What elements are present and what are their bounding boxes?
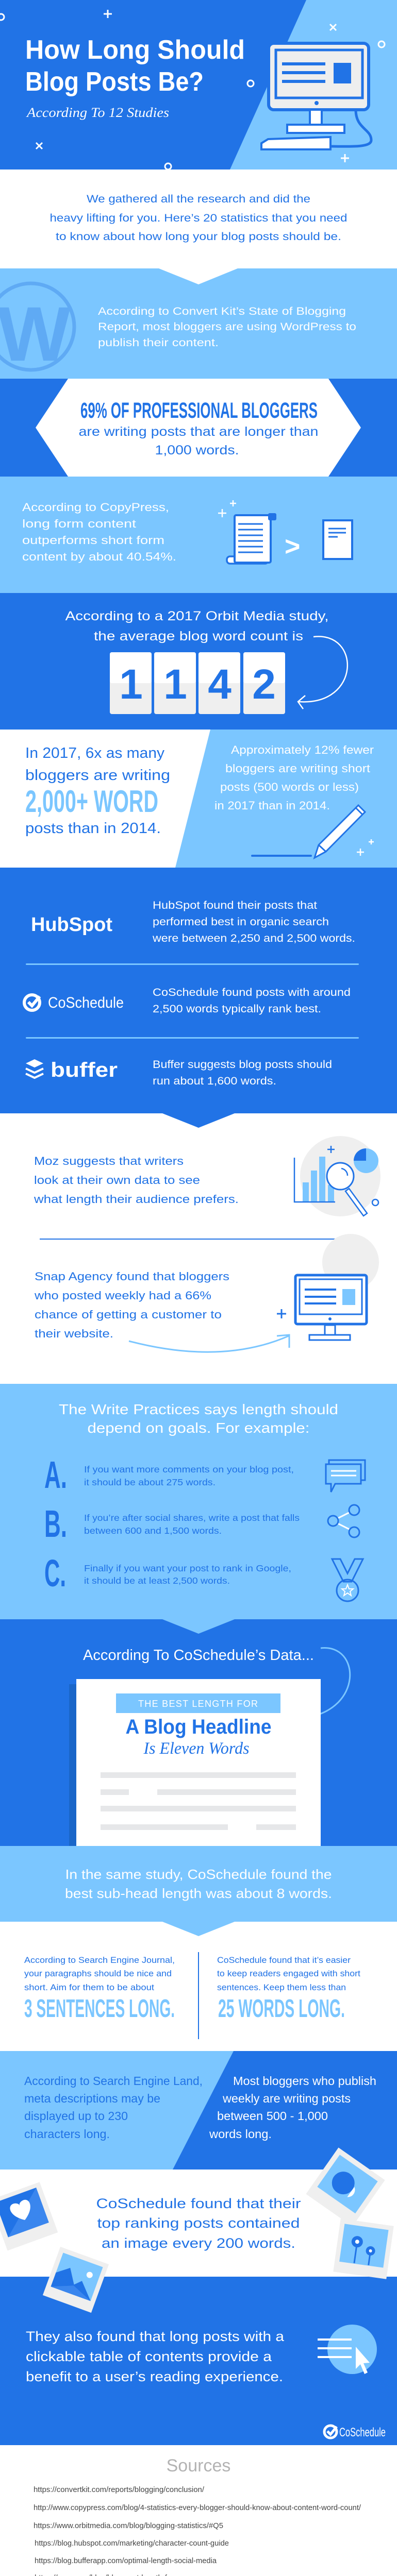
counter tiles 1142: 1 bbox=[163, 661, 187, 708]
panel: 2017 split bbox=[0, 730, 397, 868]
icon: click list bbox=[318, 2325, 377, 2374]
text: copypress bbox=[22, 501, 176, 563]
counter tiles 1142 bbox=[110, 652, 285, 714]
text: moz bbox=[34, 1155, 239, 1206]
text: 12% fewer: Approximately 12% fewer bbox=[231, 743, 374, 756]
text: coschedule: CoSchedule found posts with around bbox=[153, 987, 351, 998]
text: buffer bbox=[153, 1059, 332, 1087]
card: headline length: THE BEST LENGTH FOR bbox=[138, 1699, 258, 1709]
text: 6x as many: bloggers are writing bbox=[25, 767, 170, 784]
panel: 69% hexagon bbox=[0, 379, 397, 477]
sources list: https://blog.bufferapp.com/optimal-length-social-media bbox=[35, 2557, 217, 2565]
text: wordpress: Report, most bloggers are using WordPress to bbox=[98, 321, 356, 333]
text: search engine journal: short. Aim for them to be about bbox=[24, 1982, 154, 1992]
text: hubspot bbox=[152, 900, 355, 944]
panel: moz and snap bbox=[0, 1113, 397, 1384]
text: buffer: Buffer suggests blog posts should bbox=[153, 1059, 332, 1071]
icon: long vs short doc: > bbox=[285, 532, 300, 562]
item A: If you want more comments on your blog post, bbox=[84, 1464, 294, 1475]
text: meta descriptions: According to Search Engine Land, bbox=[24, 2074, 203, 2088]
text: snap agency: Snap Agency found that bloggers bbox=[35, 1270, 229, 1283]
text: copypress: outperforms short form bbox=[22, 534, 164, 547]
text: wordpress: publish their content. bbox=[98, 337, 219, 349]
text: weekly bloggers: Most bloggers who publish bbox=[233, 2074, 376, 2088]
text: snap agency: chance of getting a customer to bbox=[35, 1308, 222, 1321]
text: weekly bloggers: weekly are writing posts bbox=[222, 2092, 351, 2105]
heading: write practice: The Write Practices says length should bbox=[59, 1401, 338, 1417]
text: moz: what length their audience prefers. bbox=[34, 1193, 239, 1206]
item B: between 600 and 1,500 words. bbox=[84, 1526, 222, 1536]
icon: polaroid flowers bbox=[333, 2218, 394, 2279]
logo: buffer: buffer bbox=[51, 1059, 118, 1081]
panel: table of contents bbox=[0, 2277, 397, 2445]
text: table of contents bbox=[26, 2329, 285, 2384]
item B: B. bbox=[44, 1502, 67, 1545]
text: hubspot: HubSpot found their posts that bbox=[153, 900, 317, 911]
intro text: heavy lifting for you. Here’s 20 statistics that you need bbox=[49, 212, 348, 224]
panel: sub-head length bbox=[0, 1846, 397, 1922]
panel: write practice bbox=[0, 1384, 397, 1619]
text: search engine journal: According to Search Engine Journal, bbox=[24, 1955, 175, 1965]
text: hubspot: were between 2,250 and 2,500 words. bbox=[152, 933, 355, 944]
text: table of contents: They also found that long posts with a bbox=[26, 2329, 285, 2344]
text: 6x as many bbox=[25, 745, 170, 837]
subtitle: According To 12 Studies bbox=[26, 105, 169, 120]
item A bbox=[44, 1453, 294, 1496]
sources heading: Sources bbox=[167, 2456, 230, 2476]
item B: If you’re after social shares, write a post that falls bbox=[84, 1513, 300, 1523]
card: headline length: Is Eleven Words bbox=[143, 1739, 250, 1758]
text: orbit: According to a 2017 Orbit Media study, bbox=[65, 609, 329, 623]
icon: long vs short doc bbox=[218, 500, 352, 564]
counter tiles 1142: 1 bbox=[119, 661, 143, 708]
text: buffer: run about 1,600 words. bbox=[153, 1075, 276, 1087]
text: search engine journal: 3 SENTENCES LONG. bbox=[24, 1995, 175, 2023]
text: short sentences: CoSchedule found that it’s easier bbox=[217, 1955, 351, 1965]
text: snap agency: their website. bbox=[35, 1327, 113, 1340]
logo: hubspot: HubSpot bbox=[31, 914, 112, 936]
heading: write practice bbox=[59, 1401, 338, 1436]
icon: polaroid mountain bbox=[43, 2247, 109, 2313]
text: short sentences: to keep readers engaged with short bbox=[217, 1969, 360, 1978]
item C: C. bbox=[44, 1552, 66, 1595]
sources list: https://www.orbitmedia.com/blog/blogging-statistics/#Q5 bbox=[34, 2522, 223, 2530]
sources list bbox=[34, 2486, 361, 2576]
title: How Long Should bbox=[25, 35, 245, 65]
logo: coschedule: CoSchedule bbox=[48, 994, 124, 1011]
text: search engine journal: your paragraphs should be nice and bbox=[24, 1969, 172, 1978]
text: snap agency bbox=[34, 1270, 229, 1340]
panel: wordpress bbox=[0, 268, 397, 379]
text: weekly bloggers: words long. bbox=[209, 2127, 272, 2141]
text: orbit bbox=[65, 609, 329, 643]
text: meta descriptions: displayed up to 230 bbox=[24, 2109, 128, 2123]
icon: chart with magnifier bbox=[294, 1136, 381, 1216]
icon: computer bbox=[261, 43, 371, 149]
heading: write practice: depend on goals. For example: bbox=[88, 1420, 309, 1436]
text: snap agency: who posted weekly had a 66% bbox=[34, 1289, 211, 1302]
arrow: curved bbox=[298, 636, 348, 709]
text: short sentences bbox=[217, 1955, 360, 2023]
panel: sub-head length: In the same study, CoSchedule found the bbox=[65, 1867, 332, 1882]
text: copypress: long form content bbox=[22, 517, 136, 530]
logo: buffer bbox=[26, 1059, 118, 1081]
text: search engine journal bbox=[24, 1955, 175, 2023]
arrow: curved to monitor bbox=[129, 1335, 289, 1352]
sources list: https://blog.hubspot.com/marketing/character-count-guide bbox=[35, 2539, 229, 2548]
stat text bbox=[78, 425, 319, 457]
text: 12% fewer: in 2017 than in 2014. bbox=[214, 799, 330, 812]
panel: sentences and words bbox=[0, 1922, 397, 2051]
text: table of contents: clickable table of contents provide a bbox=[26, 2349, 272, 2364]
panel: images every 200 words bbox=[0, 2170, 397, 2277]
text: meta descriptions: characters long. bbox=[24, 2127, 110, 2141]
intro text: We gathered all the research and did the bbox=[87, 193, 310, 205]
text: moz: look at their own data to see bbox=[34, 1174, 200, 1187]
text: images: top ranking posts contained bbox=[97, 2215, 300, 2231]
title line 2: Blog Posts Be? bbox=[25, 67, 204, 97]
heading: coschedule data: According To CoSchedule’s Data... bbox=[83, 1647, 314, 1664]
icon: pencil bbox=[252, 805, 374, 858]
text: images bbox=[96, 2196, 301, 2251]
panel: coschedule data bbox=[0, 1619, 397, 1846]
sources list: https://convertkit.com/reports/blogging/conclusion/ bbox=[34, 2486, 205, 2494]
text: 6x as many: In 2017, 6x as many bbox=[25, 745, 165, 761]
arrow: curved to card bbox=[304, 1648, 350, 1722]
panel: logos bbox=[0, 868, 397, 1113]
icon: polaroid apple bbox=[306, 2147, 385, 2227]
icon: medal bbox=[332, 1559, 363, 1601]
text: moz: Moz suggests that writers bbox=[34, 1155, 184, 1167]
item C bbox=[44, 1552, 291, 1595]
header panel bbox=[0, 0, 397, 170]
icon: monitor bbox=[277, 1234, 379, 1340]
counter tiles 1142: 4 bbox=[208, 661, 231, 708]
panel: copypress bbox=[0, 477, 397, 593]
panel: meta and weekly split bbox=[0, 2051, 397, 2170]
text: wordpress: According to Convert Kit’s State of Blogging bbox=[98, 306, 346, 317]
sources list: http://www.copypress.com/blog/4-statistics-every-blogger-should-know-about-content-word-count/ bbox=[34, 2504, 361, 2512]
text: 6x as many: posts than in 2014. bbox=[25, 820, 161, 837]
item A: it should be about 275 words. bbox=[84, 1477, 216, 1487]
panel: sub-head length: best sub-head length was about 8 words. bbox=[65, 1886, 332, 1901]
text: orbit: the average blog word count is bbox=[94, 629, 303, 643]
item A: A. bbox=[44, 1453, 67, 1496]
icon: polaroid heart bbox=[0, 2182, 58, 2251]
text: meta descriptions bbox=[24, 2074, 203, 2141]
item C: Finally if you want your post to rank in Google, bbox=[84, 1563, 291, 1573]
text: copypress: content by about 40.54%. bbox=[22, 550, 176, 563]
text: images: an image every 200 words. bbox=[102, 2235, 295, 2251]
text: weekly bloggers: between 500 - 1,000 bbox=[217, 2109, 328, 2123]
text: hubspot: performed best in organic search bbox=[153, 916, 329, 928]
text: 12% fewer: bloggers are writing short bbox=[225, 762, 370, 775]
item C: it should be at least 2,500 words. bbox=[84, 1575, 230, 1586]
intro text: to know about how long your blog posts should be. bbox=[56, 231, 341, 243]
counter tiles 1142: 2 bbox=[252, 661, 276, 708]
text: 12% fewer: posts (500 words or less) bbox=[220, 781, 359, 793]
text: coschedule bbox=[153, 987, 351, 1015]
card: headline length: A Blog Headline bbox=[126, 1716, 271, 1738]
text: 6x as many: 2,000+ WORD bbox=[25, 784, 158, 819]
panel: orbit media bbox=[0, 593, 397, 730]
text: 12% fewer bbox=[214, 743, 374, 812]
stat text: 1,000 words. bbox=[155, 443, 239, 457]
card: headline length bbox=[69, 1679, 321, 1846]
text: meta descriptions: meta descriptions may be bbox=[24, 2092, 160, 2105]
logo: coschedule footer bbox=[324, 2426, 386, 2439]
text: short sentences: sentences. Keep them less than bbox=[217, 1982, 346, 1992]
text: weekly bloggers bbox=[209, 2074, 376, 2141]
icon: comments bbox=[326, 1460, 365, 1492]
text: coschedule: 2,500 words typically rank best. bbox=[153, 1003, 321, 1015]
text: copypress: According to CopyPress, bbox=[22, 501, 169, 514]
intro text bbox=[49, 193, 348, 243]
text: images: CoSchedule found that their bbox=[96, 2196, 301, 2211]
item B bbox=[44, 1502, 300, 1545]
icon: share bbox=[328, 1505, 359, 1537]
text: wordpress bbox=[98, 306, 356, 349]
text: table of contents: benefit to a user’s reading experience. bbox=[26, 2369, 283, 2384]
stat text: are writing posts that are longer than bbox=[78, 425, 319, 439]
